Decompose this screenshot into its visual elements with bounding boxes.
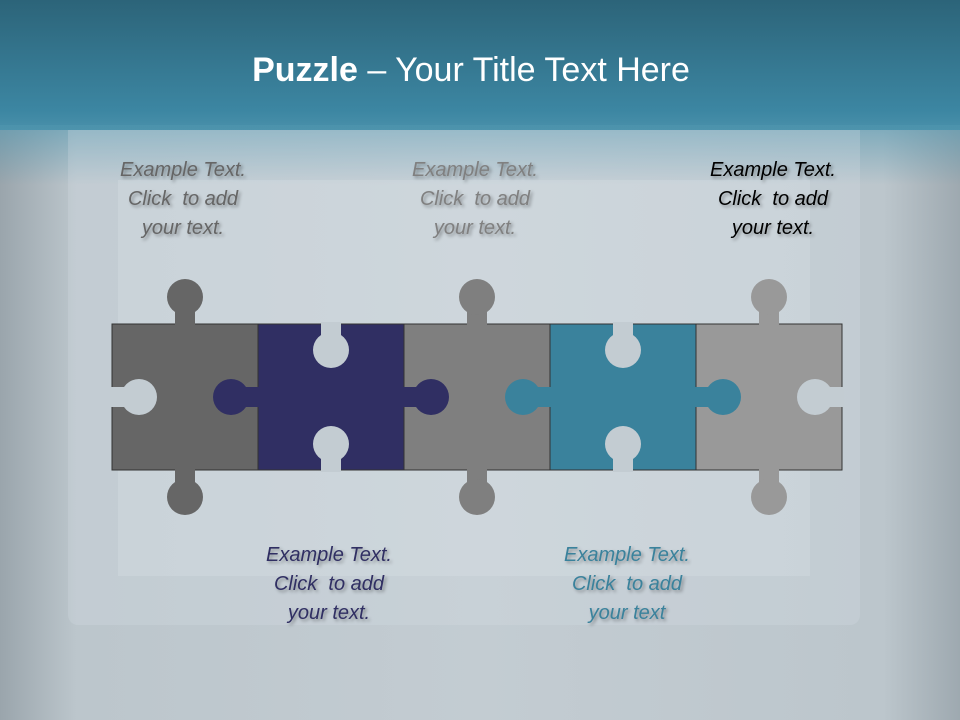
text: bottom left: Click to add: [274, 573, 384, 595]
title: Puzzle – Your Title Text Here: [252, 51, 690, 89]
text: bottom right: [564, 544, 690, 626]
text: top middle: [412, 159, 538, 242]
text: top right: your text.: [732, 217, 814, 239]
text: bottom left: your text.: [288, 602, 370, 624]
text: top left: Example Text.: [120, 159, 246, 181]
text: top left: your text.: [142, 217, 224, 239]
text: top right: Example Text.: [710, 159, 836, 181]
piece 4: [505, 324, 741, 470]
holes: [110, 322, 844, 472]
text: top left: [120, 159, 246, 242]
text: bottom right: Example Text.: [564, 544, 690, 566]
text: bottom left: [266, 544, 392, 626]
text: top middle: Click to add: [420, 188, 530, 210]
text: bottom right: your text: [589, 602, 665, 624]
text: top middle: your text.: [434, 217, 516, 239]
piece 3: [404, 279, 550, 515]
piece 5: [696, 279, 842, 515]
text: top right: [710, 159, 836, 242]
background panel: [68, 130, 860, 625]
piece 2: [213, 324, 449, 470]
piece 1: [112, 279, 258, 515]
text: top right: Click to add: [718, 188, 828, 210]
text: top left: Click to add: [128, 188, 238, 210]
text: bottom left: Example Text.: [266, 544, 392, 566]
text: top middle: Example Text.: [412, 159, 538, 181]
text: bottom right: Click to add: [572, 573, 682, 595]
